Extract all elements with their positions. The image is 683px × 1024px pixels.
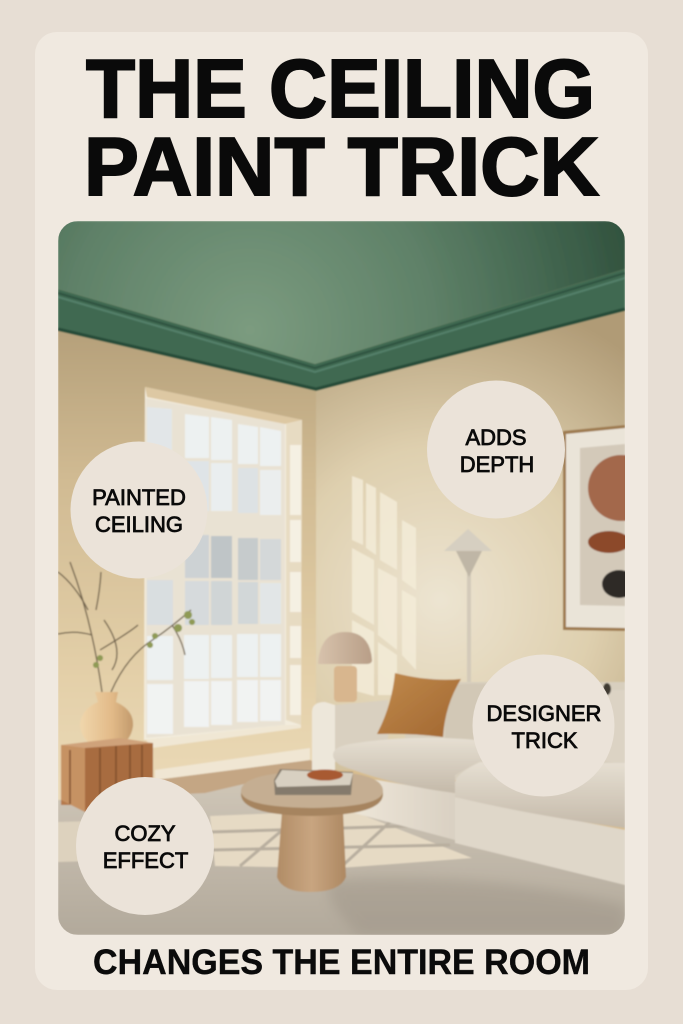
right wall: [316, 311, 625, 770]
floor and rug: [58, 760, 625, 935]
seat cushions: [333, 738, 482, 793]
callout: painted ceiling: PAINTED: [92, 485, 186, 510]
plant and vase: [58, 562, 195, 748]
callout: painted ceiling: [70, 442, 208, 578]
sofa arm: [334, 702, 388, 750]
callout: cozy effect: COZY: [114, 821, 176, 846]
floor lamp: [444, 529, 492, 685]
green ceiling: [58, 221, 625, 391]
sofa: [312, 673, 625, 885]
callout: adds depth: [427, 380, 565, 518]
seat base: [355, 779, 456, 840]
callout: designer trick: TRICK: [512, 728, 578, 753]
callout: painted ceiling: CEILING: [95, 512, 183, 537]
wooden side table: [61, 738, 153, 812]
pillow: [377, 673, 461, 737]
callout: cozy effect: EFFECT: [103, 848, 188, 873]
title: [84, 42, 599, 213]
window: [144, 387, 310, 780]
panel: room photo illustration: [58, 221, 654, 935]
table lamp: [318, 632, 372, 702]
callout: cozy effect: [76, 777, 214, 915]
title: PAINT TRICK: [84, 120, 599, 213]
left wall: [58, 330, 316, 820]
books: [274, 769, 353, 795]
callout: designer trick: DESIGNER: [487, 701, 601, 726]
wall art: [562, 424, 625, 632]
footer tagline: CHANGES THE ENTIRE ROOM: [93, 943, 590, 982]
callout: adds depth: ADDS: [465, 425, 527, 450]
callout: adds depth: DEPTH: [460, 452, 534, 477]
sunlight on wall: [352, 476, 416, 696]
callout: designer trick: [472, 654, 614, 796]
title: THE CEILING: [86, 42, 595, 135]
round coffee table: [241, 769, 383, 892]
